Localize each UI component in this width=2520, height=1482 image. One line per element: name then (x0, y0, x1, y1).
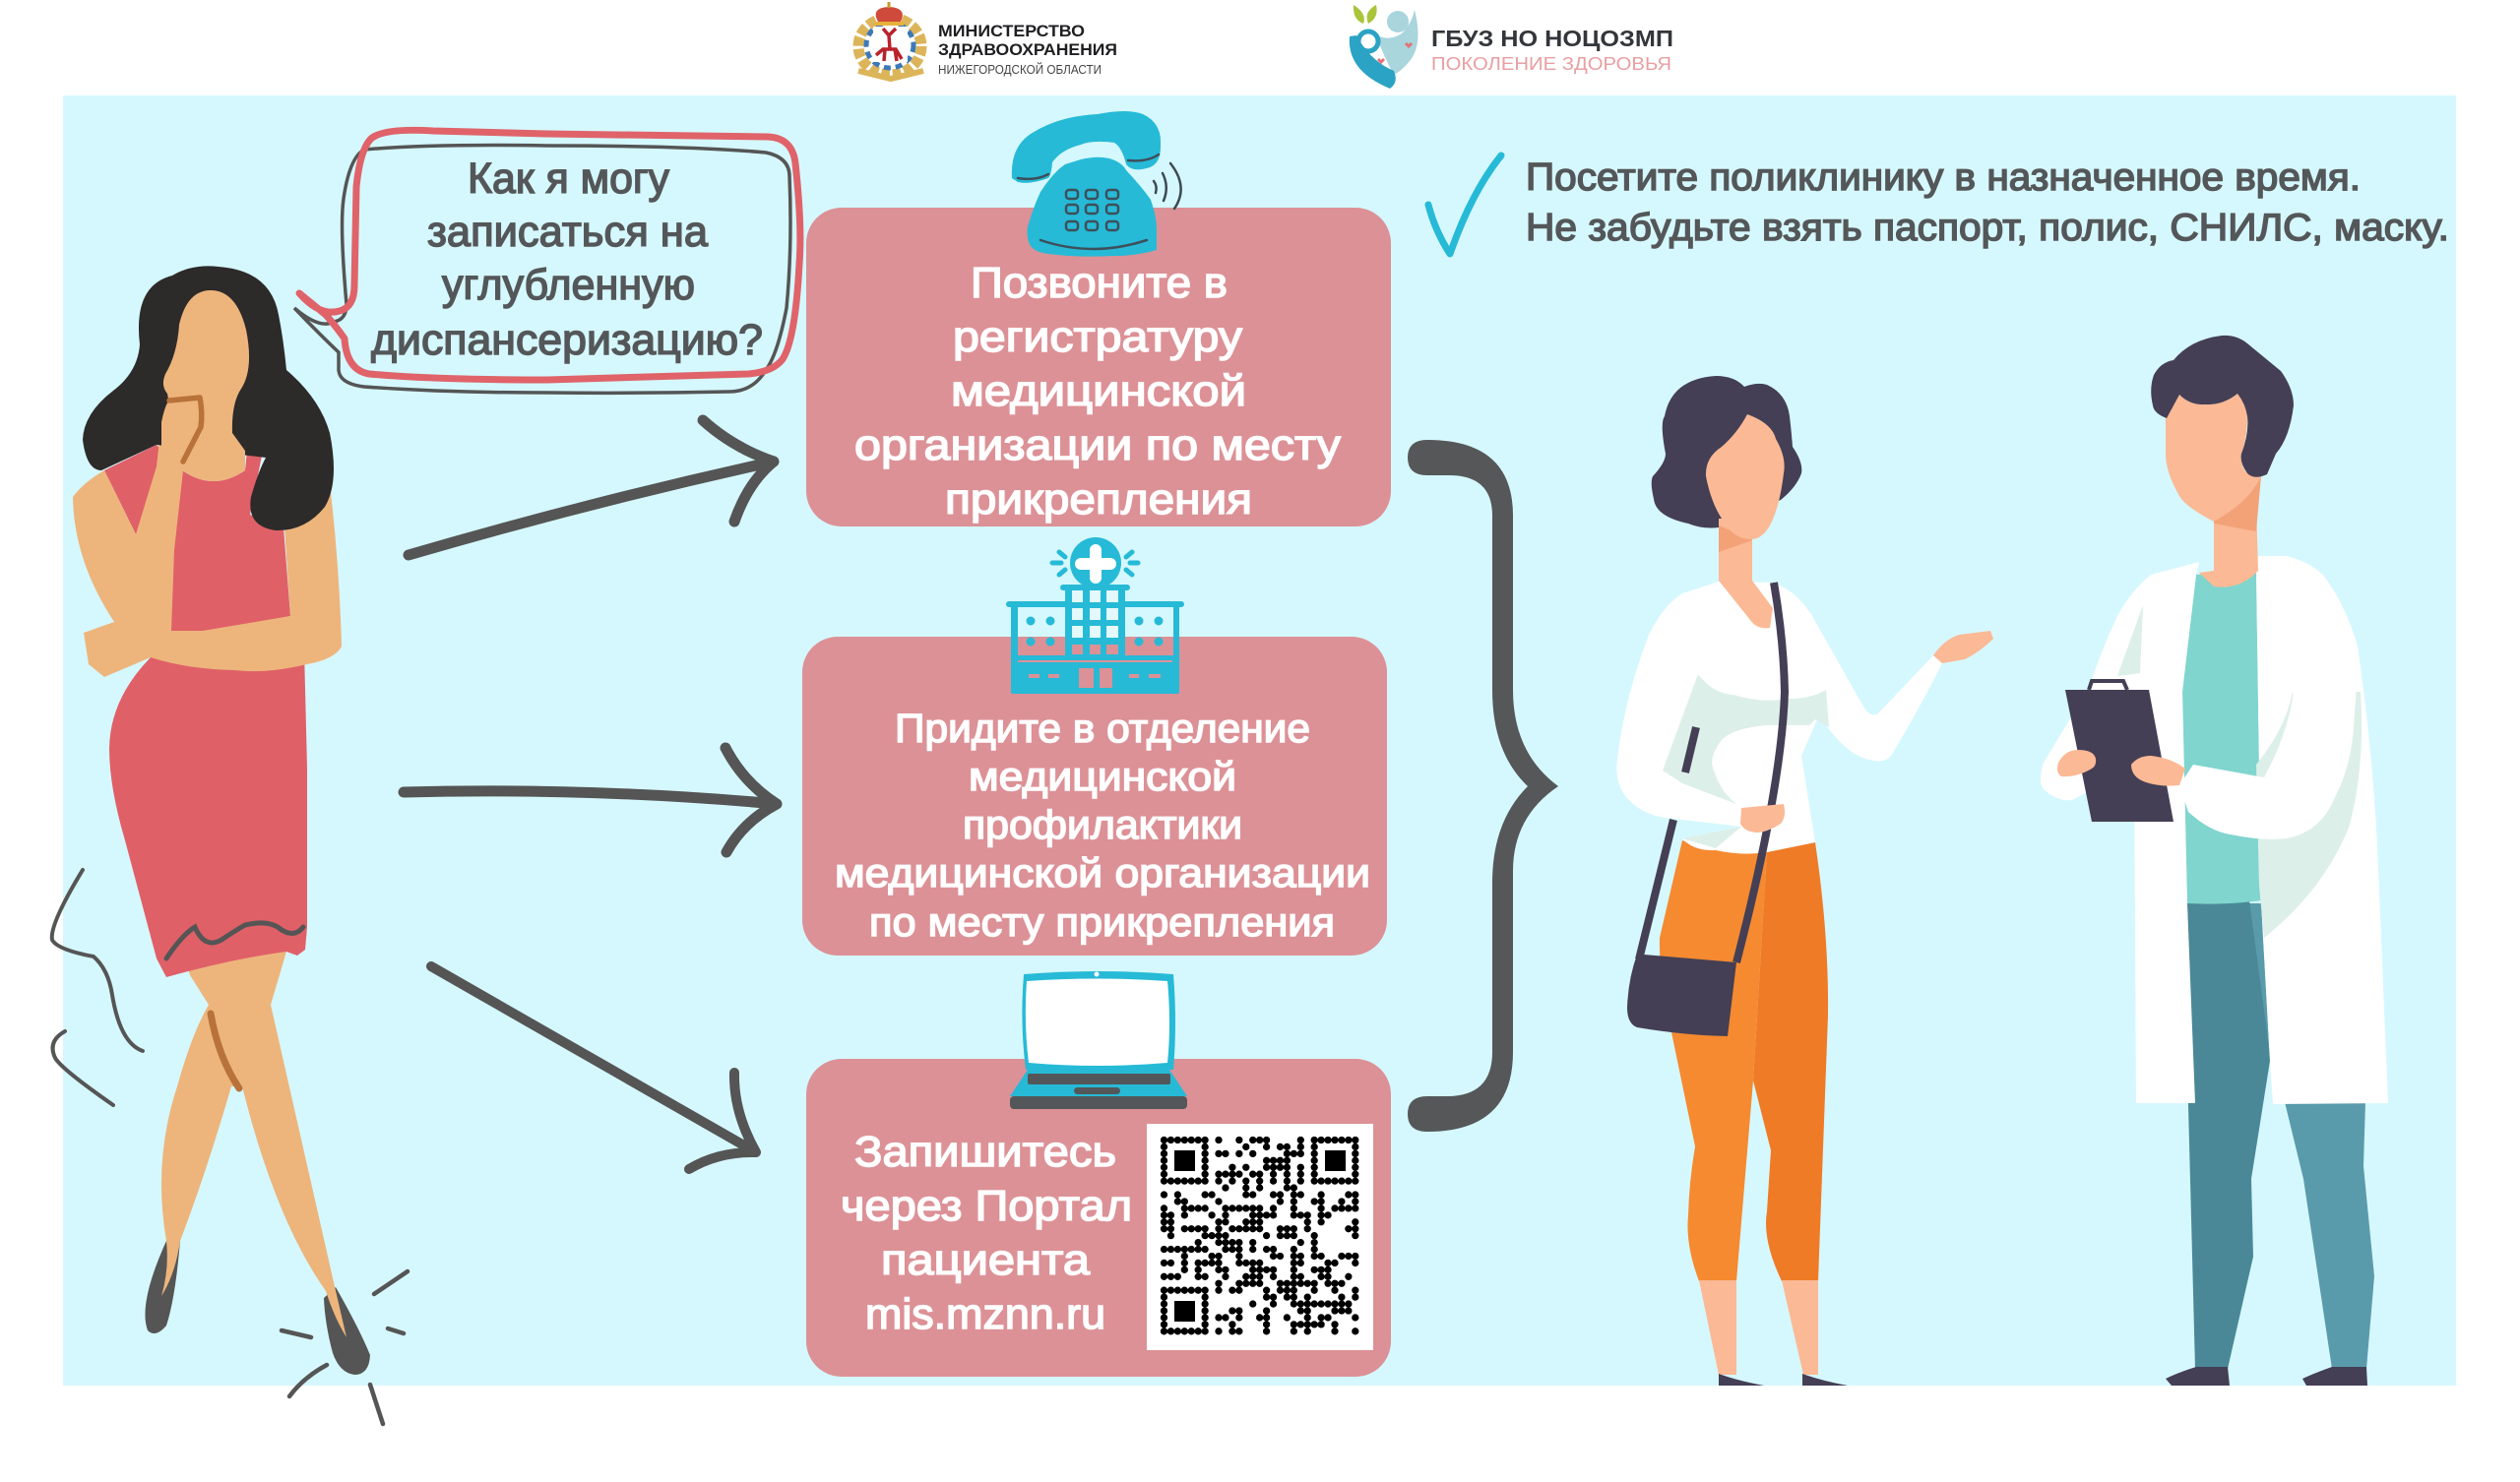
coat right panel (2256, 556, 2388, 1104)
organization name (1431, 26, 1673, 74)
card text (835, 706, 1370, 945)
neck (2199, 476, 2261, 587)
dress (104, 445, 307, 977)
shoe sparks (282, 1271, 408, 1424)
icon: check mark (1428, 155, 1501, 254)
card text: Позвоните в (971, 259, 1228, 307)
card text: медицинской (969, 754, 1236, 799)
hair (2151, 336, 2294, 477)
instruction text (1526, 156, 2449, 249)
icon: regional crest (858, 2, 923, 79)
trousers (1660, 840, 1767, 1281)
bubble text: диспансеризацию? (371, 316, 763, 364)
sweater shading (1663, 674, 1829, 848)
icon: sound waves (1154, 163, 1181, 209)
dress hem wave (166, 923, 303, 958)
card text: прикрепления (945, 475, 1252, 524)
hands (2057, 750, 2185, 786)
face (2166, 394, 2261, 522)
card text (841, 1128, 1132, 1338)
ministry name (938, 22, 1117, 77)
sweater (1616, 582, 1942, 854)
bag (1627, 955, 1736, 1036)
card background (806, 208, 1391, 526)
legs (1699, 1280, 1818, 1375)
arms (73, 398, 342, 677)
arrow: to portal option (431, 966, 756, 1169)
ministry name: МИНИСТЕРСТВО (938, 22, 1085, 40)
bubble red outline (299, 130, 800, 380)
instruction text: Посетите поликлинику в назначенное время. (1526, 156, 2361, 199)
card text: Запишитесь (854, 1128, 1116, 1176)
ministry name: НИЖЕГОРОДСКОЙ ОБЛАСТИ (938, 62, 1102, 77)
icon: telephone (1012, 111, 1161, 257)
left leg (2187, 900, 2270, 1369)
arrow: to phone option (409, 420, 774, 555)
card text: пациента (881, 1236, 1091, 1284)
illustration: thinking woman (52, 266, 408, 1424)
hair (1652, 376, 1801, 527)
shirt (2182, 571, 2261, 904)
card text: регистратуру (953, 313, 1242, 361)
speech bubble (294, 130, 800, 393)
card text: через Портал (841, 1182, 1132, 1230)
legs (161, 935, 346, 1337)
brace (1408, 440, 1558, 1132)
shoes (2166, 1367, 2367, 1386)
illustration: patient (1616, 376, 1993, 1386)
coat shading (2117, 605, 2143, 676)
instruction text: Не забудьте взять паспорт, полис, СНИЛС, маску. (1526, 207, 2449, 249)
ministry name: ЗДРАВООХРАНЕНИЯ (938, 40, 1117, 59)
card text: mis.mznn.ru (865, 1290, 1105, 1338)
bag strap (1639, 583, 1785, 962)
card text (854, 259, 1341, 524)
card text: организации по месту (854, 421, 1341, 469)
instruction with check mark (1428, 155, 2449, 254)
bubble gray outline (294, 146, 790, 393)
hair (83, 266, 334, 530)
icon: hospital (1006, 537, 1184, 694)
card background (806, 1059, 1391, 1377)
right leg (2285, 1102, 2374, 1369)
card text: профилактики (963, 802, 1242, 847)
icon: health generation emblem (1350, 5, 1418, 89)
card text: Придите в отделение (895, 706, 1310, 751)
option card: phone (806, 111, 1391, 526)
bubble text: углубленную (442, 261, 695, 309)
illustration: doctor (2041, 336, 2388, 1386)
organization name: ПОКОЛЕНИЕ ЗДОРОВЬЯ (1431, 54, 1671, 74)
neck and face (1719, 519, 1773, 628)
icon: laptop (1010, 971, 1187, 1109)
card text: по месту прикрепления (869, 899, 1335, 945)
logo: ministry of health (858, 2, 1117, 79)
bubble text: Как я могу (468, 154, 669, 203)
motion squiggles (52, 870, 143, 1105)
logo: health generation (1350, 5, 1673, 89)
face and neck (163, 290, 249, 481)
hand (161, 398, 201, 470)
coat sleeve (2179, 590, 2358, 839)
arrow: to department option (404, 748, 777, 852)
card background (802, 637, 1387, 956)
raised hand (1933, 631, 1993, 663)
card text: медицинской (951, 367, 1246, 415)
QR code (1147, 1124, 1373, 1350)
back strap upper (1682, 727, 1696, 783)
bubble text (371, 154, 763, 364)
organization name: ГБУЗ НО НОЦОЗМП (1431, 26, 1673, 51)
coat left panel (2041, 562, 2199, 1103)
bubble text: записаться на (427, 208, 709, 256)
card text: медицинской организации (835, 850, 1370, 895)
option card: portal (806, 971, 1391, 1377)
knee line (211, 1014, 239, 1088)
option card: department (802, 537, 1387, 956)
shoes (1719, 1374, 1848, 1386)
clipboard (2065, 681, 2174, 822)
hand on strap (1740, 804, 1785, 833)
shoes (145, 1241, 370, 1375)
